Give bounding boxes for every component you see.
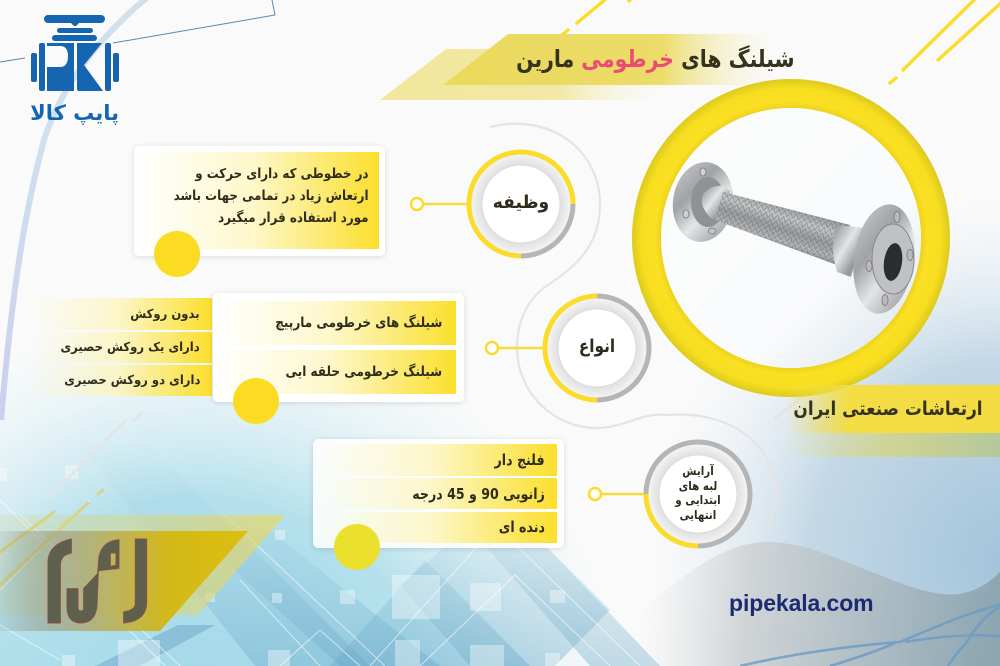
row: annular hose: شیلنگ خرطومی حلقه ایی <box>285 364 442 380</box>
row: flanged <box>314 444 557 476</box>
node label: end finishing: لبه های <box>679 479 717 493</box>
sub-item: without coating <box>30 298 212 330</box>
panel: function <box>134 146 385 256</box>
row: threaded <box>314 512 557 543</box>
sub-item: without coating: بدون روکش <box>131 306 200 321</box>
panel gradient and text: مورد استفاده قرار میگیرد <box>219 210 369 226</box>
icon: flexible hose <box>668 158 921 318</box>
panel: end finishing <box>313 439 564 548</box>
row: flanged: فلنج دار <box>495 451 545 469</box>
row: elbow: زانویی 90 و 45 درجه <box>412 485 545 503</box>
panel: types sub-list <box>45 298 212 396</box>
node 1 ring <box>411 152 573 256</box>
node label: end finishing: آرایش <box>682 464 714 478</box>
sub-item: double braid <box>30 365 212 396</box>
node 3 ring <box>589 442 750 546</box>
row: elbow <box>314 478 557 509</box>
node label: end finishing: انتهایی <box>680 508 716 522</box>
panel: types <box>213 293 464 402</box>
sub-item: double braid: دارای دو روکش حصیری <box>64 372 200 387</box>
node label: function: وظیفه <box>493 192 549 213</box>
title: شیلنگ های خرطومی مارین <box>517 45 795 73</box>
logo: pipe kala: پایپ کالا <box>30 101 119 125</box>
node 2 ring <box>486 296 649 400</box>
row: threaded: دنده ای <box>499 518 545 536</box>
company name: ارتعاشات صنعتی ایران <box>794 398 983 420</box>
panel gradient and text <box>135 152 379 249</box>
logo: pipe kala <box>30 15 119 125</box>
website: pipekala.com <box>729 590 874 616</box>
node label: end finishing: ابتدایی و <box>675 493 721 507</box>
panel gradient and text: در خطوطی که دارای حرکت و <box>196 166 369 182</box>
node label: types: انواع <box>579 336 615 357</box>
row: spiral hose: شیلنگ های خرطومی مارپیچ <box>275 315 442 331</box>
sub-item: single braid <box>30 332 212 363</box>
panel accent circle: types <box>233 378 279 424</box>
row: spiral hose <box>214 301 456 345</box>
row: annular hose <box>214 350 456 394</box>
panel gradient and text: ارتعاش زیاد در تمامی جهات باشد <box>174 188 369 204</box>
node label: end finishing <box>674 464 721 522</box>
sub-item: single braid: دارای یک روکش حصیری <box>61 339 200 354</box>
panel accent circle: end finishing <box>334 524 380 570</box>
panel accent circle: function <box>154 231 200 277</box>
